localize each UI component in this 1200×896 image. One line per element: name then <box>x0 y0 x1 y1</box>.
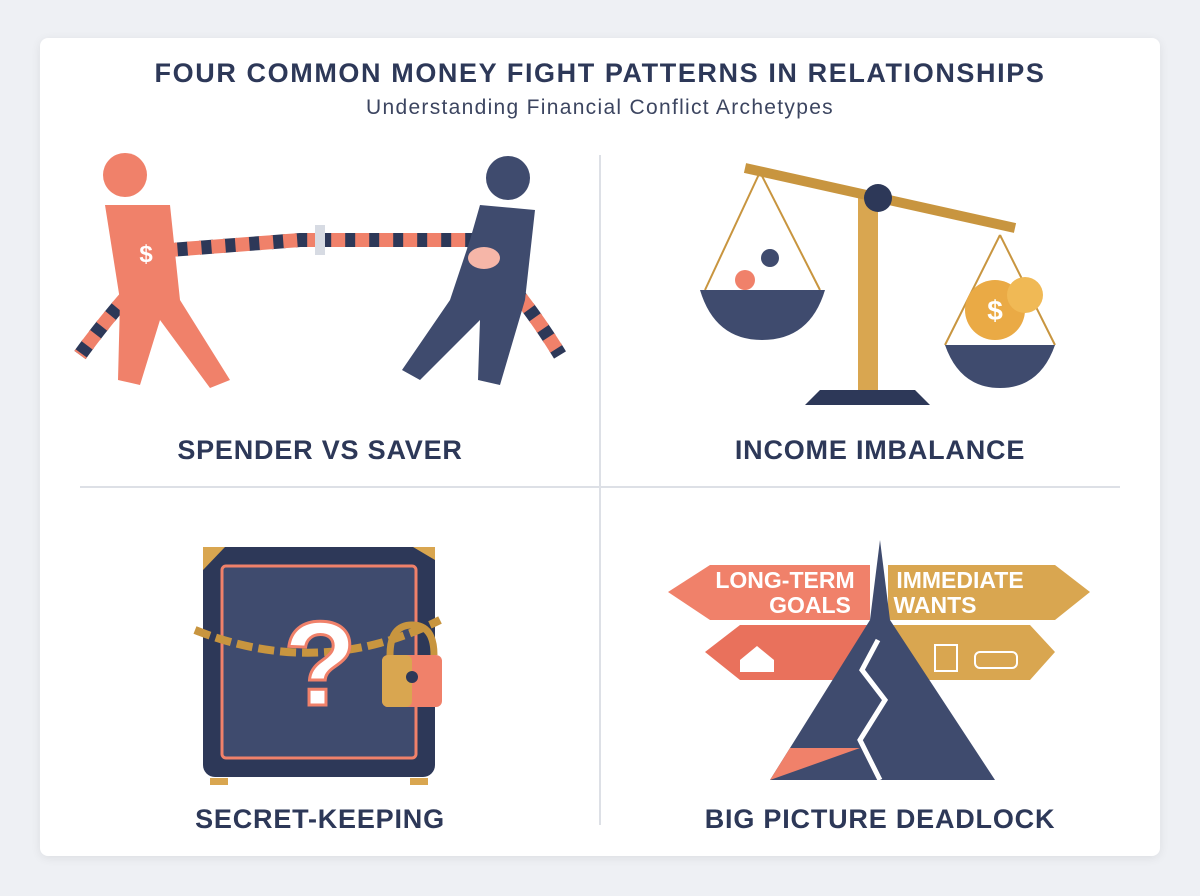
label: secret-keeping: SECRET-KEEPING <box>195 804 445 834</box>
title: FOUR COMMON MONEY FIGHT PATTERNS IN RELATIONSHIPS <box>155 58 1045 88</box>
icon: safe <box>195 547 442 785</box>
icon: scale <box>700 168 1055 405</box>
label: income imbalance: INCOME IMBALANCE <box>735 435 1025 465</box>
icon: signpost <box>668 540 1090 780</box>
icon: tug of war <box>80 153 560 388</box>
icon: safe: ? <box>283 597 357 731</box>
subtitle: Understanding Financial Conflict Archetypes <box>366 96 834 119</box>
icon: tug of war: $ <box>139 241 153 268</box>
label: big picture deadlock: BIG PICTURE DEADLOCK <box>705 804 1055 834</box>
label: spender vs saver: SPENDER VS SAVER <box>177 435 463 465</box>
icon: scale: $ <box>987 295 1003 326</box>
icon: signpost: IMMEDIATE <box>896 567 1024 593</box>
icon: signpost: WANTS <box>893 592 977 618</box>
icon: signpost: LONG-TERM <box>715 567 855 593</box>
icon: signpost: GOALS <box>769 592 851 618</box>
